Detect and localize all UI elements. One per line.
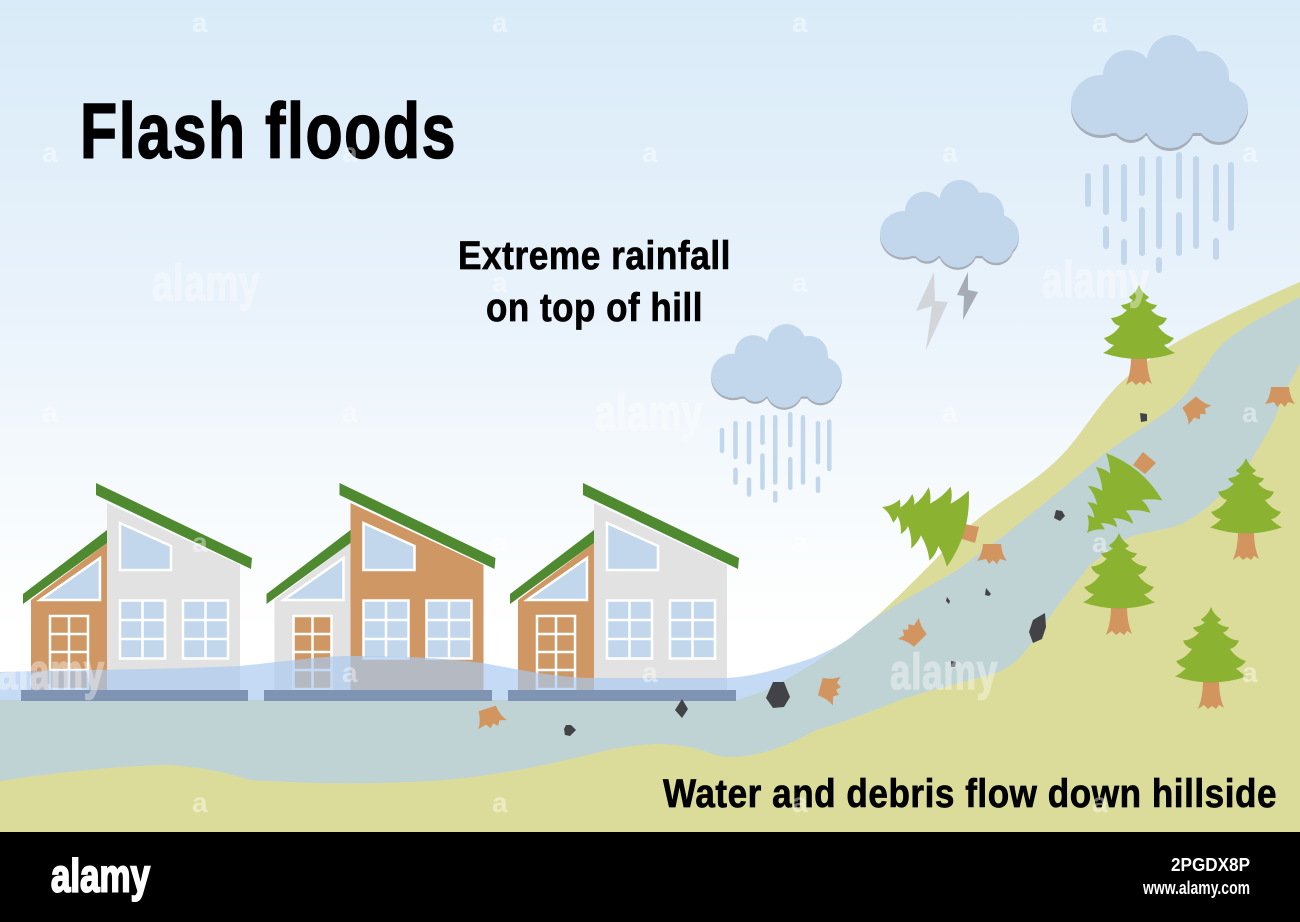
stock watermarks: alamy <box>595 385 703 441</box>
stock watermarks: a <box>642 657 658 688</box>
stock watermarks: a <box>1092 527 1108 558</box>
tree stumps in debris flow <box>473 387 1295 732</box>
cloud: storm with lightning <box>880 180 1019 350</box>
stock watermarks: a <box>1092 7 1108 38</box>
river of water and debris <box>0 297 1300 783</box>
flood water over houses <box>0 638 850 710</box>
fallen tree on the bank <box>871 469 979 569</box>
stock watermarks: a <box>792 7 808 38</box>
house 1 <box>23 483 252 690</box>
stock watermarks: a <box>342 137 358 168</box>
stock watermarks: alamy <box>890 644 998 700</box>
footer image id and url <box>1142 855 1250 898</box>
stock watermarks: alamy <box>0 644 105 700</box>
house 3 <box>510 483 739 690</box>
stock watermarks: a <box>192 787 208 818</box>
stock watermarks: a <box>492 267 508 298</box>
stock watermarks: a <box>792 787 808 818</box>
stock watermarks: a <box>1242 137 1258 168</box>
stock watermarks: a <box>42 137 58 168</box>
cloud: small with rain <box>711 324 842 503</box>
footer logo: alamy <box>51 850 150 902</box>
stock watermarks: a <box>1092 787 1108 818</box>
stock watermarks: a <box>342 657 358 688</box>
footer image id and url: 2PGDX8P <box>1171 855 1250 875</box>
black footer bar <box>0 832 1300 922</box>
stock watermarks: a <box>1242 397 1258 428</box>
stock watermarks: a <box>942 397 958 428</box>
stock watermarks: a <box>792 527 808 558</box>
stock watermarks: a <box>492 787 508 818</box>
stock watermarks: a <box>192 527 208 558</box>
stock watermarks: a <box>42 397 58 428</box>
stock watermarks: alamy <box>152 255 260 311</box>
rocks in debris flow <box>564 413 1147 736</box>
label: extreme rainfall: on top of hill <box>486 286 703 330</box>
title: Flash floods <box>80 86 457 174</box>
stock watermarks: alamy <box>1042 252 1150 308</box>
stock watermarks: a <box>642 137 658 168</box>
standing pine trees <box>1083 285 1282 709</box>
label: extreme rainfall: Extreme rainfall <box>458 234 731 278</box>
house 2 <box>266 483 496 690</box>
stock watermarks: a <box>342 397 358 428</box>
cloud: large with heavy rain <box>1071 35 1248 273</box>
stock watermarks: a <box>492 527 508 558</box>
fallen tree in the river <box>1059 448 1167 557</box>
stock watermarks: a <box>192 7 208 38</box>
hillside ground <box>0 282 1300 832</box>
stock watermarks: a <box>492 7 508 38</box>
house foundation slabs <box>21 690 736 701</box>
stock watermarks: a <box>792 267 808 298</box>
stock watermarks: a <box>1242 657 1258 688</box>
footer image id and url: www.alamy.com <box>1142 878 1250 898</box>
stock watermarks: a <box>942 137 958 168</box>
